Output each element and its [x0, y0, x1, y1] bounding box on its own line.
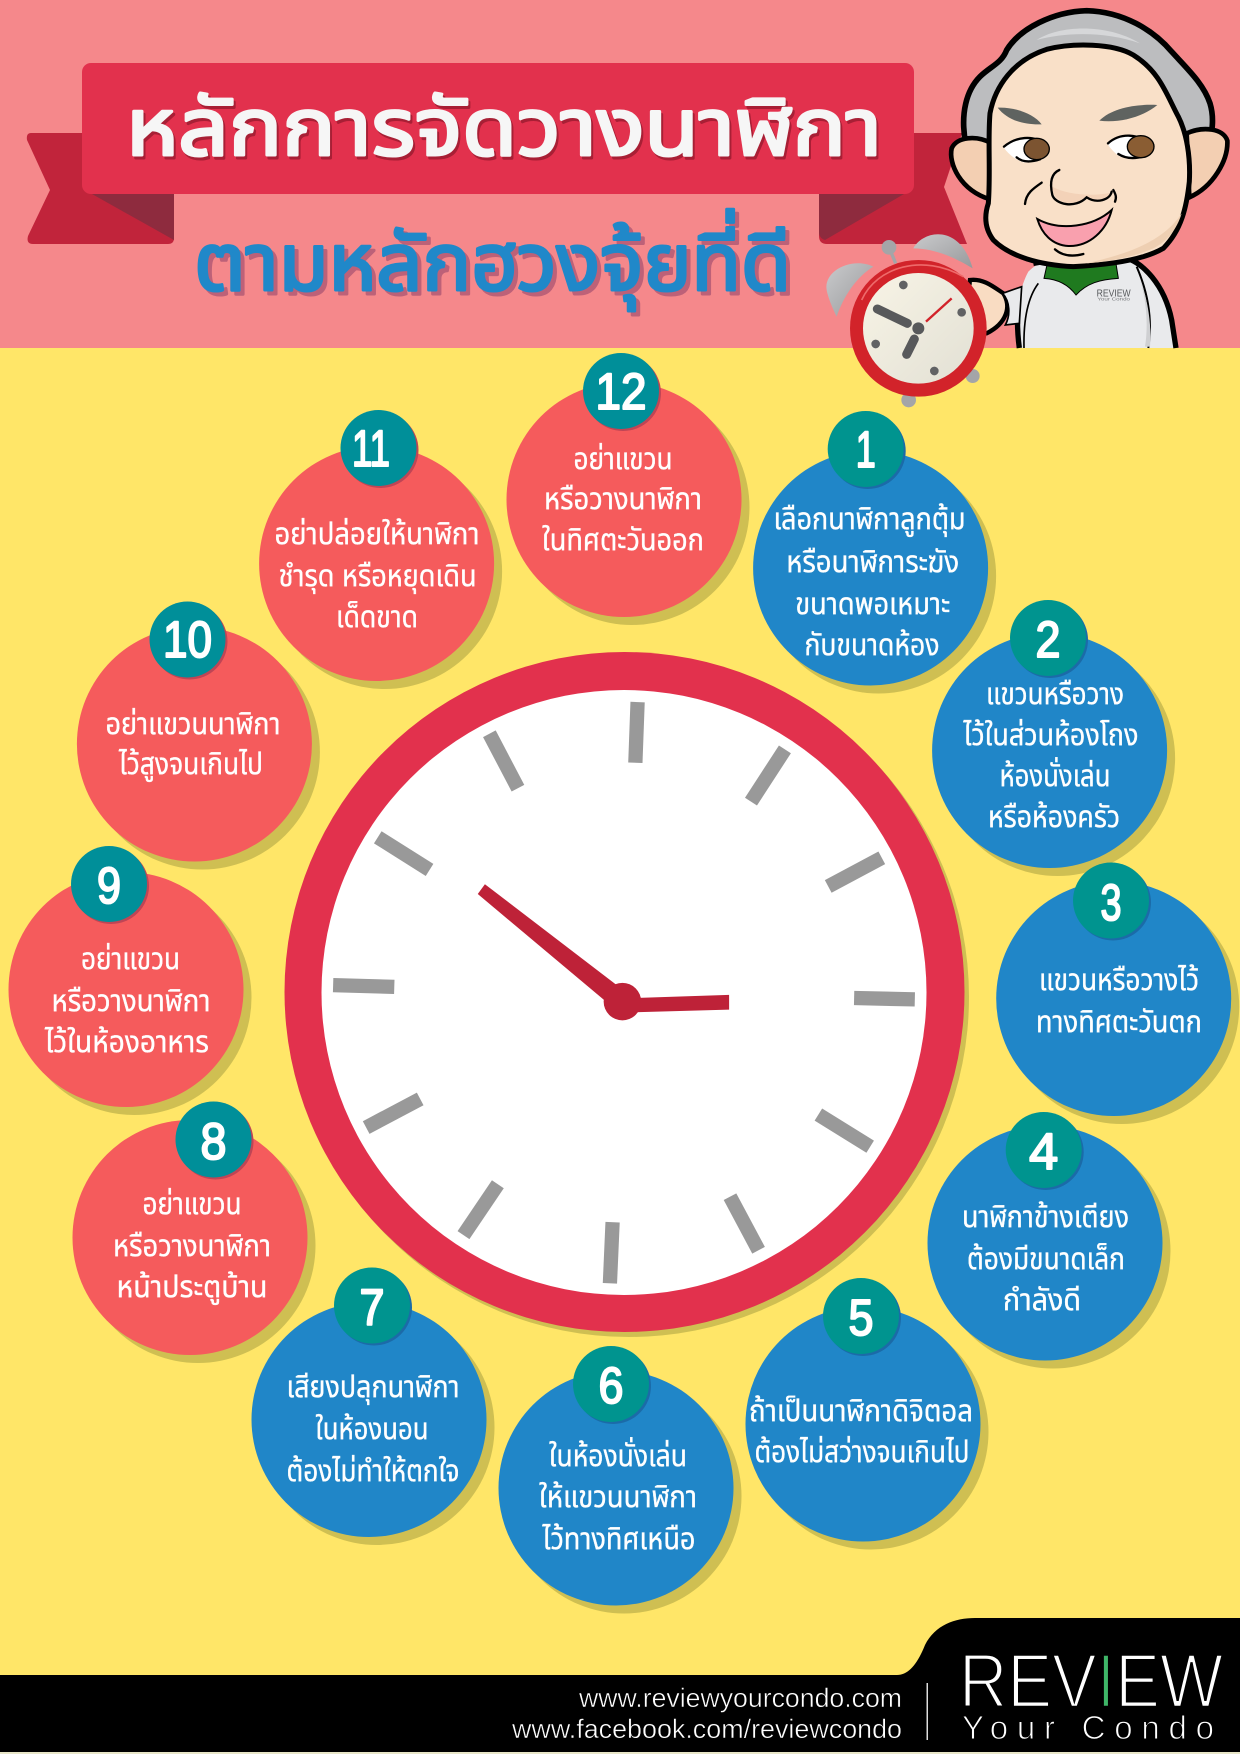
step 2: ห้องนั่งเล่น [1000, 757, 1110, 793]
step 10 [77, 602, 320, 870]
title line 1: หลักการจัดวางนาฬิกา [126, 83, 882, 172]
large clock shadow [289, 657, 969, 1337]
nose fill [1052, 187, 1112, 203]
step 9: อย่าแขวน [81, 943, 180, 976]
step 9 [8, 846, 252, 1115]
feet [966, 369, 980, 383]
sleeve [1003, 287, 1022, 325]
step 1 [753, 411, 996, 694]
step 7: ในห้องนอน [316, 1413, 428, 1446]
hour hand [633, 995, 729, 1012]
step 8: หน้าประตูบ้าน [116, 1271, 268, 1305]
shirt outline [1017, 257, 1176, 348]
ribbon left tail end [90, 133, 174, 244]
eyebrow right [1099, 105, 1157, 121]
step 11: ชำรุด หรือหยุดเดิน [279, 560, 477, 594]
step 2: แขวนหรือวาง [986, 678, 1124, 711]
footer logo: Your Condo [962, 1709, 1214, 1746]
step 12: ในทิศตะวันออก [542, 524, 704, 557]
footer website links [511, 1683, 902, 1744]
clock face [863, 273, 974, 384]
step 5: 5 [848, 1289, 874, 1346]
step 10: อย่าแขวนนาฬิกา [106, 708, 280, 741]
collar [1044, 257, 1118, 295]
step 5: ถ้าเป็นนาฬิกาดิจิตอล [749, 1395, 973, 1428]
footer website links: www.reviewyourcondo.com [578, 1683, 902, 1713]
eye left lash [1004, 138, 1047, 161]
ribbon main panel [82, 63, 914, 194]
hand [963, 280, 1007, 337]
step 6 [498, 1346, 742, 1614]
step 5: ต้องไม่สว่างจนเกินไป [754, 1436, 970, 1469]
step 3: 3 [1100, 874, 1122, 931]
step 7 [252, 1268, 494, 1545]
shirt body [1017, 257, 1176, 348]
footer divider [926, 1683, 928, 1740]
footer website links: www.facebook.com/reviewcondo [511, 1714, 902, 1744]
step 6: ไว้ทางทิศเหนือ [542, 1523, 696, 1556]
step 4: นาฬิกาข้างเตียง [962, 1201, 1129, 1234]
step 2: 2 [1036, 611, 1060, 668]
footer black band [0, 1618, 1240, 1752]
step 8: 8 [200, 1113, 226, 1170]
sleeve shade [1140, 280, 1150, 347]
step 6: ให้แขวนนาฬิกา [539, 1481, 697, 1514]
bell left [826, 263, 873, 317]
hair highlight [1037, 29, 1140, 43]
step 2 [932, 600, 1175, 876]
step 1: ขนาดพอเหมาะ [795, 588, 950, 621]
title line 2: ตามหลักฮวงจุ้ยที่ดี [198, 213, 795, 315]
step 9: ไว้ในห้องอาหาร [44, 1026, 209, 1059]
face [986, 45, 1190, 267]
ribbon right tail [819, 133, 967, 244]
step 12: 12 [596, 363, 646, 420]
ribbon right fold [819, 194, 904, 240]
sleeve line [1137, 267, 1150, 348]
bottom edge strip [0, 1752, 1240, 1754]
step 7: 7 [360, 1279, 384, 1336]
step 6: ในห้องนั่งเล่น [549, 1437, 687, 1473]
ribbon left fold [92, 194, 174, 240]
step 10: 10 [163, 611, 212, 668]
iris right [1127, 136, 1154, 158]
ear right [1187, 129, 1227, 197]
step 12 [506, 353, 750, 625]
step 1: เลือกนาฬิกาลูกตุ้ม [774, 503, 966, 537]
footer logo: REVIEW [959, 1639, 1223, 1724]
step 8: หรือวางนาฬิกา [113, 1230, 271, 1263]
step 4: ต้องมีขนาดเล็ก [967, 1243, 1125, 1276]
step 4: กำลังดี [1003, 1284, 1081, 1317]
step 6: 6 [598, 1357, 624, 1414]
iris left [1024, 138, 1049, 160]
step 1: 1 [856, 421, 876, 478]
shirt logo: REVIEW [1097, 289, 1131, 300]
step 3: ทางทิศตะวันตก [1036, 1006, 1202, 1039]
step 11 [259, 410, 502, 689]
step 1: หรือนาฬิการะฆัง [786, 546, 959, 579]
step 9: 9 [97, 857, 121, 914]
hair [964, 11, 1212, 200]
step 8 [72, 1102, 316, 1363]
step 4: 4 [1029, 1123, 1058, 1180]
hub [604, 983, 641, 1020]
eye right lash [1108, 136, 1153, 158]
face dots [871, 281, 966, 375]
step 11: เด็ดขาด [336, 601, 418, 634]
step 9: หรือวางนาฬิกา [52, 985, 210, 1018]
hour ticks [333, 702, 915, 1283]
mascot: cartoon man holding clock [826, 11, 1227, 407]
nose and smile lines [1025, 170, 1116, 256]
clock ticks and hands [333, 702, 915, 1283]
title line 1: หลักการจัดวางนาฬิกา [128, 86, 884, 175]
step 7: ต้องไม่ทำให้ตกใจ [286, 1455, 460, 1488]
step 3: แขวนหรือวางไว้ [1039, 964, 1199, 997]
alarm clock [826, 234, 987, 407]
step 5 [746, 1278, 988, 1550]
step 10: ไว้สูงจนเกินไป [118, 748, 263, 782]
mouth [1037, 210, 1112, 246]
step 12: หรือวางนาฬิกา [544, 483, 702, 516]
large clock face [322, 690, 926, 1295]
step 11: อย่าปล่อยให้นาฬิกา [274, 518, 480, 551]
knob [889, 247, 896, 263]
step 2: หรือห้องครัว [988, 801, 1120, 834]
eyebrow left [998, 108, 1042, 124]
step 12: อย่าแขวน [574, 443, 672, 476]
header band: pink [0, 0, 1240, 348]
ribbon left tail [27, 133, 90, 244]
eye right [1107, 135, 1154, 158]
step 3 [996, 862, 1239, 1124]
shirt logo: Your Condo [1097, 297, 1131, 302]
clock rim [850, 260, 987, 397]
small clock hands [877, 309, 914, 354]
arm line [1024, 283, 1038, 348]
step 7: เสียงปลุกนาฬิกา [286, 1371, 460, 1405]
step 1: กับขนาดห้อง [804, 629, 940, 662]
step 8: อย่าแขวน [142, 1188, 242, 1221]
ear left [951, 138, 992, 199]
step 11: 11 [352, 420, 390, 477]
large clock rim [284, 652, 964, 1332]
title ribbon [27, 63, 967, 244]
eye left [1003, 137, 1048, 162]
jaw shade [1087, 213, 1182, 263]
step 2: ไว้ในส่วนห้องโถง [963, 719, 1138, 752]
minute hand [478, 884, 618, 1001]
bell right [913, 234, 973, 268]
title line 2: ตามหลักฮวงจุ้ยที่ดี [194, 209, 791, 311]
step 4 [928, 1112, 1170, 1368]
